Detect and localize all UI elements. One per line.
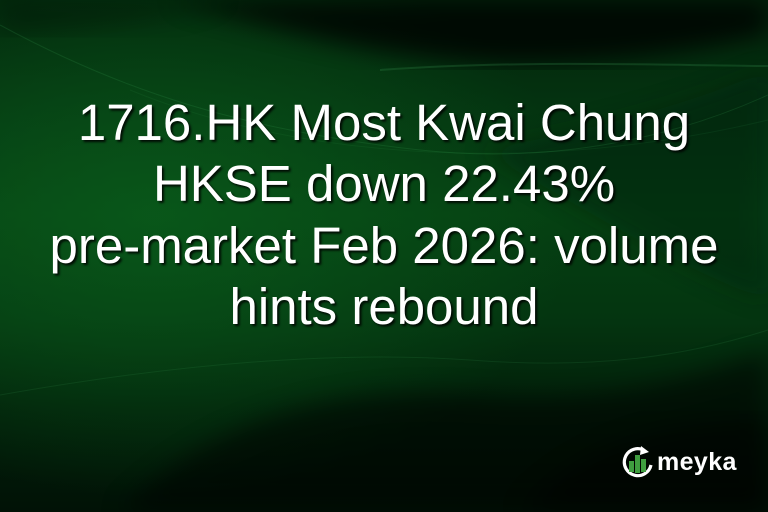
- logo: meyka: [622, 446, 737, 478]
- title: hints rebound: [229, 278, 539, 335]
- icon: circular arrow with bar chart: [622, 446, 652, 478]
- title: pre-market Feb 2026: volume: [50, 217, 718, 274]
- title: [50, 94, 719, 335]
- title: 1716.HK Most Kwai Chung: [78, 94, 690, 151]
- title: HKSE down 22.43%: [153, 155, 615, 212]
- wordmark: meyka: [657, 448, 737, 476]
